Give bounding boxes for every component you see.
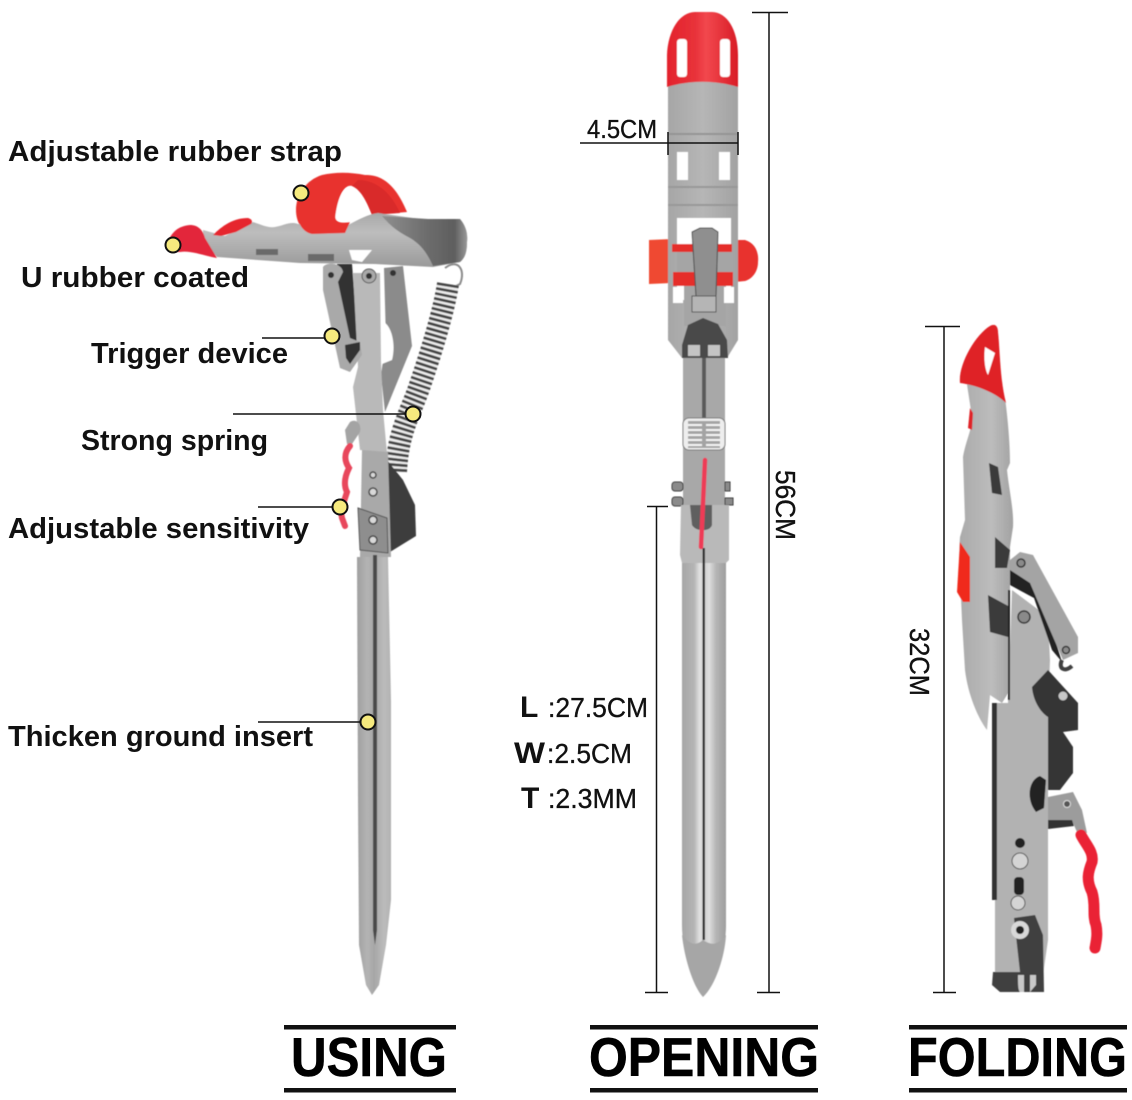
lever end loop <box>1061 660 1072 669</box>
strap front band <box>297 176 350 234</box>
specifications <box>514 691 648 815</box>
centre bracket <box>692 228 718 296</box>
specifications: W <box>514 737 546 770</box>
leader: ground insert line <box>258 721 361 723</box>
lower collar <box>680 505 729 563</box>
blade groove <box>373 555 377 945</box>
bottom notch <box>1018 975 1036 992</box>
tube slots <box>256 249 334 261</box>
body windows <box>677 152 731 300</box>
small red <box>968 408 973 430</box>
heading: trigger device label: Trigger device <box>91 338 288 370</box>
grey body <box>668 78 738 358</box>
ground insert blade <box>357 557 391 995</box>
stem centre line <box>702 358 706 425</box>
heading: thicken ground insert label: Thicken ground insert <box>8 721 313 753</box>
spring <box>396 284 448 472</box>
main plate <box>992 590 1050 975</box>
heading: adjustable rubber strap label: Adjustable rubber strap <box>8 136 342 168</box>
collar shadow <box>690 505 712 530</box>
heading: opening: OPENING <box>589 1026 819 1088</box>
tube opening <box>349 250 372 262</box>
lower lever <box>1048 792 1087 833</box>
grey tube body <box>959 378 1013 730</box>
main plate <box>353 273 387 453</box>
illustration: rod holder in using position <box>167 173 467 995</box>
heading: u rubber coated label: U rubber coated <box>21 262 249 294</box>
sensitivity lever <box>345 421 360 444</box>
trigger head <box>682 318 728 358</box>
side rails <box>677 252 731 326</box>
dimension: width 4.5cm: 4.5CM <box>587 114 657 144</box>
red patch <box>957 542 970 602</box>
band shade lower <box>668 186 738 206</box>
lever dark edge <box>1048 820 1074 829</box>
strap visible in window <box>672 244 733 286</box>
bolts <box>672 482 733 506</box>
red second grip <box>213 218 252 236</box>
specifications: :2.3MM <box>548 783 637 814</box>
illustration: rod holder opened <box>649 12 758 997</box>
stem <box>683 358 725 505</box>
red cord <box>701 460 705 547</box>
dimension: total 56cm <box>752 12 801 992</box>
dark band under lever <box>1010 568 1062 662</box>
head highlights <box>688 345 720 356</box>
dimension: 32cm: 32CM <box>904 628 935 696</box>
red sensitivity cord <box>341 446 350 526</box>
trigger arm <box>323 264 362 372</box>
cap windows <box>677 39 730 77</box>
lower dark plate <box>386 460 416 552</box>
bolts <box>369 472 377 544</box>
bolts and holes <box>1011 838 1029 939</box>
white arm hole <box>382 321 394 364</box>
white strap opening <box>335 188 370 222</box>
spring hook <box>445 264 462 288</box>
dark tube end <box>382 216 467 266</box>
heading: using: USING <box>291 1026 447 1088</box>
strap inner highlight <box>352 180 400 215</box>
ground insert blade <box>682 563 726 997</box>
callout markers <box>166 186 420 730</box>
leader: sensitivity line <box>258 506 334 508</box>
specifications: :27.5CM <box>548 692 648 723</box>
lever pins <box>1017 559 1070 654</box>
red strap right <box>735 240 758 282</box>
dark trigger band <box>337 264 358 345</box>
dimension: insert length <box>645 506 668 992</box>
heading: strong spring label: Strong spring <box>81 425 268 457</box>
illustration: rod holder folded <box>957 325 1097 992</box>
dark side rail <box>992 703 997 900</box>
dark claw <box>1032 670 1078 790</box>
red tip <box>960 325 1006 403</box>
back arm <box>381 266 412 412</box>
plate top joint <box>362 269 376 283</box>
trigger joints <box>328 270 396 364</box>
claw bolt <box>1058 691 1068 701</box>
tip window <box>984 347 995 375</box>
lower plate <box>692 296 716 312</box>
slots <box>988 463 1010 637</box>
spring <box>683 418 725 450</box>
plate edge <box>1008 590 1010 700</box>
red cap <box>667 12 738 87</box>
panel: folding view <box>904 325 1127 1092</box>
lower bracket <box>360 450 391 557</box>
panel: opening view <box>514 12 819 1092</box>
dimension: width 4.5cm <box>580 114 738 155</box>
bottom dark plate <box>992 915 1044 992</box>
blade tip <box>682 935 726 997</box>
specifications: T <box>521 782 539 815</box>
tube body <box>203 213 467 267</box>
body band shade <box>668 133 738 135</box>
spring teeth <box>1030 776 1046 812</box>
specifications: :2.5CM <box>547 738 632 769</box>
lever arm <box>1010 552 1078 660</box>
leader: trigger device line <box>262 337 326 339</box>
red strap back <box>296 173 407 234</box>
white rail gaps <box>673 287 734 303</box>
red strap left <box>649 239 672 284</box>
panel: using view <box>8 136 467 1092</box>
red tube tip <box>167 225 217 258</box>
red cord <box>1081 835 1097 948</box>
leader: strong spring line <box>233 413 406 415</box>
specifications: L <box>520 691 538 724</box>
dimension: 32cm <box>904 326 960 992</box>
heading: adjustable sensitivity label: Adjustable sensitivity <box>8 513 309 545</box>
lever pin <box>1064 800 1070 808</box>
clip plate <box>358 508 388 553</box>
blade groove <box>702 548 705 940</box>
dimension: total 56cm: 56CM <box>770 470 801 540</box>
